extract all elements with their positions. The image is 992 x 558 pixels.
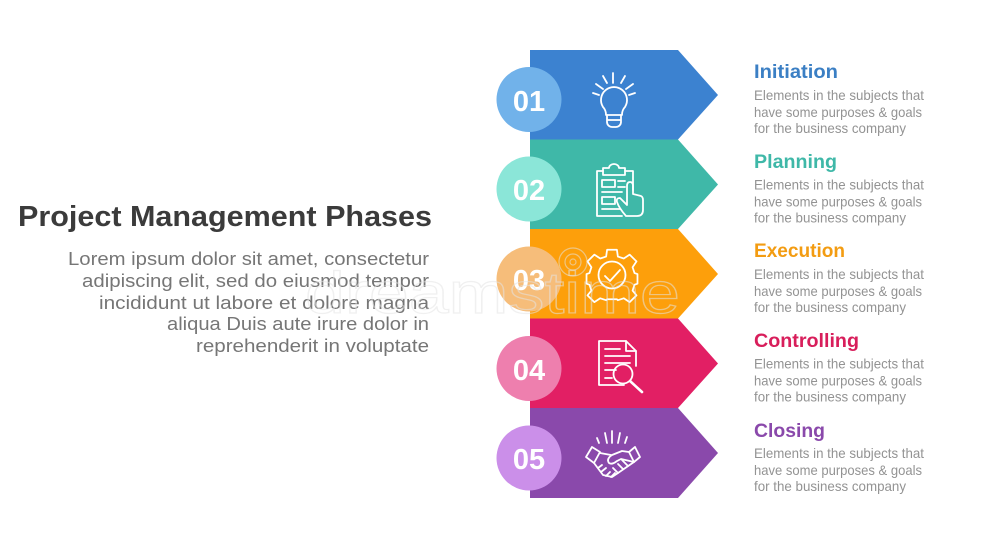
badge 04 bbox=[496, 336, 562, 401]
phase 5 text: Closing bbox=[754, 420, 924, 494]
phase 3 text: Execution bbox=[754, 240, 924, 315]
phase 02 arrow bbox=[530, 140, 718, 229]
badge 04: 04 bbox=[513, 355, 545, 387]
phase 5 text: Closing: for the business company bbox=[754, 478, 906, 494]
intro paragraph: aliqua Duis aute irure dolor in bbox=[167, 314, 429, 334]
badge 05 bbox=[496, 426, 562, 490]
badge 03 bbox=[496, 246, 562, 312]
icon: clipboard with hand bbox=[597, 164, 643, 216]
intro paragraph: adipiscing elit, sed do eiusmod tempor bbox=[82, 271, 429, 291]
badge 02 bbox=[496, 156, 562, 222]
phase 3 text: Execution: have some purposes & goals bbox=[754, 283, 922, 299]
phase 4 text: Controlling: Controlling bbox=[754, 330, 859, 352]
intro paragraph: Lorem ipsum dolor sit amet, consectetur bbox=[68, 249, 429, 269]
phase 4 text: Controlling: have some purposes & goals bbox=[754, 372, 922, 388]
phase 04 arrow bbox=[530, 318, 718, 408]
phase 2 text: Planning: Elements in the subjects that bbox=[754, 176, 924, 192]
icon: document with magnifier bbox=[599, 341, 642, 392]
phase 4 text: Controlling: Elements in the subjects that bbox=[754, 356, 924, 372]
phase 4 text: Controlling: for the business company bbox=[754, 388, 906, 404]
phase 3 text: Execution: for the business company bbox=[754, 299, 906, 315]
phase 03 arrow bbox=[530, 229, 718, 318]
phase 1 text: Initiation: for the business company bbox=[754, 120, 906, 136]
phase 2 text: Planning: have some purposes & goals bbox=[754, 194, 922, 210]
watermark bbox=[305, 248, 680, 326]
phase 1 text: Initiation: Initiation bbox=[754, 61, 838, 83]
icon: light bulb bbox=[593, 73, 635, 127]
phase 3 text: Execution: Execution bbox=[754, 240, 845, 262]
phase 1 text: Initiation: have some purposes & goals bbox=[754, 104, 922, 120]
badge 05: 05 bbox=[513, 444, 545, 476]
phase 4 text: Controlling bbox=[754, 330, 924, 404]
badge 02: 02 bbox=[513, 175, 545, 207]
badge 01 bbox=[496, 67, 562, 132]
icon: handshake bbox=[586, 431, 640, 477]
icon: gear with check bbox=[587, 250, 637, 302]
phase 05 arrow bbox=[530, 408, 718, 498]
phase 2 text: Planning: Planning bbox=[754, 151, 837, 173]
watermark: dreamstime bbox=[305, 261, 680, 326]
intro paragraph: reprehenderit in voluptate bbox=[196, 336, 429, 356]
phase 3 text: Execution: Elements in the subjects that bbox=[754, 266, 924, 282]
phase 01 arrow bbox=[530, 50, 718, 140]
phase 5 text: Closing: Closing bbox=[754, 420, 825, 442]
intro paragraph bbox=[68, 249, 430, 356]
phase 5 text: Closing: Elements in the subjects that bbox=[754, 445, 924, 461]
intro paragraph: incididunt ut labore et dolore magna bbox=[99, 293, 430, 313]
phase 5 text: Closing: have some purposes & goals bbox=[754, 462, 922, 478]
phase 2 text: Planning bbox=[754, 151, 924, 226]
badge 03: 03 bbox=[513, 265, 545, 297]
title: Project Management Phases bbox=[18, 201, 432, 233]
phase 1 text: Initiation bbox=[754, 61, 924, 136]
phase 2 text: Planning: for the business company bbox=[754, 210, 906, 226]
phase 1 text: Initiation: Elements in the subjects that bbox=[754, 87, 924, 103]
badge 01: 01 bbox=[513, 86, 545, 118]
